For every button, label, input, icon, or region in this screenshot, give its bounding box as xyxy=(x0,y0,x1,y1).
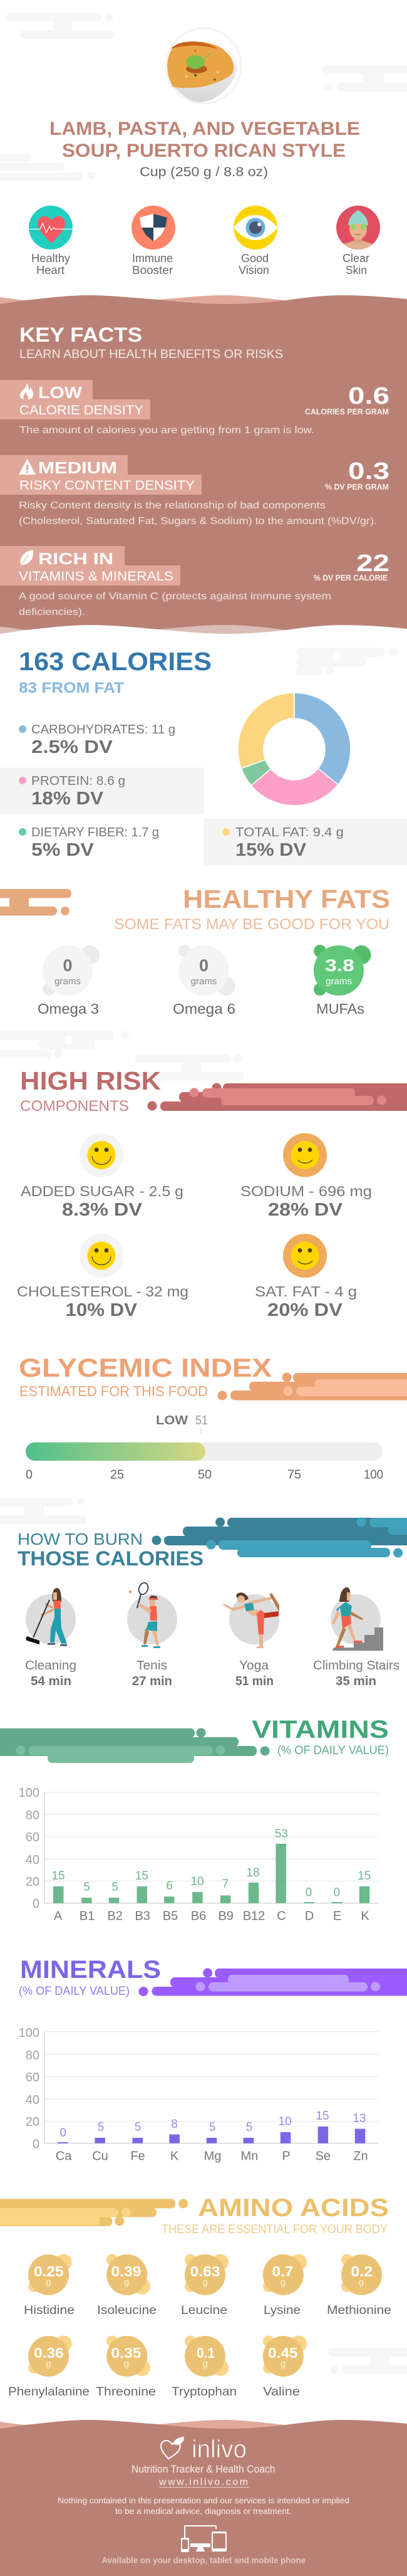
figure: person sweeping xyxy=(26,1588,67,1646)
chart: minerals bar chart: Ca xyxy=(56,2150,72,2163)
chart: vitamins bar chart: A xyxy=(54,1910,63,1923)
chart: vitamins bar chart: 15 xyxy=(358,1869,371,1883)
chart: minerals bar chart: Se xyxy=(316,2150,331,2163)
serving size: Cup (250 g / 8.8 oz) xyxy=(140,165,268,179)
disclaimer: to be a medical advice, diagnosis or treatment. xyxy=(115,2506,292,2516)
chart: glycemic index gauge: 25 xyxy=(110,1468,124,1482)
subheading: components: COMPONENTS xyxy=(20,1098,129,1115)
legend: dietary fiber: DIETARY FIBER: 1.7 g xyxy=(31,826,159,839)
banner: how to burn xyxy=(152,1517,407,1557)
icon: healthy heart xyxy=(29,206,73,250)
chart: vitamins bar chart: 53 xyxy=(275,1827,288,1841)
legend: carbohydrates: 2.5% DV xyxy=(31,737,113,757)
chart: vitamins bar chart: 18 xyxy=(246,1866,260,1879)
amino: tryptophan: Tryptophan xyxy=(172,2385,237,2399)
fact: vitamins and minerals: A good source of Vitamin C (protects against immune system xyxy=(19,591,331,602)
amino: threonine: 0.35 xyxy=(111,2345,142,2361)
amino: isoleucine xyxy=(97,2254,157,2317)
amino: valine: 0.45 xyxy=(268,2345,298,2361)
stat: omega 3: 0 xyxy=(63,956,73,975)
icon: devices xyxy=(181,2525,227,2552)
figure: stairs climber xyxy=(332,1587,383,1651)
legend: total fat xyxy=(204,819,407,865)
banner: high risk xyxy=(148,1083,407,1111)
amino: phenylalanine: g xyxy=(46,2358,51,2369)
heading: vitamins: VITAMINS xyxy=(252,1716,389,1743)
chart: minerals bar chart: 5 xyxy=(209,2121,215,2134)
icon: immune booster xyxy=(131,206,175,250)
amino: methionine: Methionine xyxy=(327,2304,391,2317)
label: good vision xyxy=(239,252,269,276)
amino: tryptophan: g xyxy=(202,2358,208,2369)
chart: vitamins bar chart: 100 xyxy=(19,1786,39,1800)
subheading: amino acids: THESE ARE ESSENTIAL FOR YOUR BODY xyxy=(162,2223,388,2236)
heading: amino acids: AMINO ACIDS xyxy=(198,2194,389,2222)
stat: omega 3 xyxy=(38,945,100,1017)
stat: omega 3: Omega 3 xyxy=(38,1001,99,1017)
chart: vitamins bar chart: 0 xyxy=(333,1886,340,1900)
chart: vitamins bar chart: 80 xyxy=(26,1809,39,1822)
legend: carbohydrates xyxy=(19,723,175,757)
amino: methionine: 0.2 xyxy=(351,2263,373,2279)
icon: smiley xyxy=(88,1141,115,1169)
panel: health benefits xyxy=(29,206,380,276)
chart: minerals bar chart: 5 xyxy=(98,2121,104,2134)
fact: risky content density xyxy=(0,455,389,527)
legend: protein xyxy=(0,767,204,814)
subheading: minerals: (% OF DAILY VALUE) xyxy=(19,1985,130,1998)
chart: minerals bar chart: 60 xyxy=(26,2071,39,2084)
fact: calorie density: LOW xyxy=(38,383,83,402)
fact: vitamins and minerals: 22 xyxy=(356,550,389,577)
disclaimer xyxy=(58,2496,349,2516)
risk: sodium: SODIUM - 696 mg xyxy=(240,1183,372,1199)
amino: valine: Valine xyxy=(263,2385,300,2399)
fact: calorie density: 0.6 xyxy=(348,383,389,409)
subheading: healthy fats: SOME FATS MAY BE GOOD FOR YOU xyxy=(114,916,389,933)
panel: key facts background xyxy=(0,295,407,634)
chart: minerals bar chart: 13 xyxy=(353,2112,366,2125)
legend: total fat: 15% DV xyxy=(235,840,307,860)
subheading: estimated: ESTIMATED FOR THIS FOOD xyxy=(19,1383,208,1399)
heading: healthy fats: HEALTHY FATS xyxy=(183,885,390,913)
chart: vitamins bar chart: E xyxy=(333,1910,341,1923)
amino: lysine xyxy=(263,2254,307,2317)
risk: added sugar: ADDED SUGAR - 2.5 g xyxy=(21,1183,183,1199)
chart: vitamins bar chart: 6 xyxy=(166,1879,173,1893)
icon: leaf xyxy=(20,550,33,565)
fact: vitamins and minerals: % DV PER CALORIE xyxy=(314,574,388,582)
activity: tennis xyxy=(127,1582,177,1688)
heading: glycemic index: GLYCEMIC INDEX xyxy=(19,1353,272,1382)
stat: omega 6: Omega 6 xyxy=(173,1001,235,1017)
chart: vitamins bar chart: K xyxy=(361,1910,369,1923)
chart: vitamins bar chart: 10 xyxy=(190,1875,204,1888)
amino: phenylalanine: Phenylalanine xyxy=(8,2385,90,2399)
icon: good vision xyxy=(234,206,277,250)
label: healthy heart xyxy=(31,252,70,276)
chart: vitamins bar chart: 0 xyxy=(33,1897,39,1911)
amino: isoleucine: g xyxy=(124,2277,129,2288)
title: SOUP, PUERTO RICAN STYLE xyxy=(62,140,346,161)
label: immune booster: Booster xyxy=(132,264,173,276)
title xyxy=(49,118,360,161)
chart: vitamins bar chart xyxy=(19,1786,379,1923)
legend: dietary fiber xyxy=(19,826,159,860)
fact: calorie density: CALORIE DENSITY xyxy=(19,403,143,418)
label: good vision: Good xyxy=(241,252,269,265)
activity: tennis: 27 min xyxy=(132,1674,172,1688)
chart: minerals bar chart: 20 xyxy=(26,2115,39,2129)
fact: risky content density: (Cholesterol, Saturated Fat, Sugars & Sodium) to the amount (%DV/gr). xyxy=(19,516,377,527)
heading: how to burn: THOSE CALORIES xyxy=(18,1547,204,1570)
amino: histidine: Histidine xyxy=(24,2304,75,2317)
chart: vitamins bar chart: 15 xyxy=(135,1869,148,1883)
label: good vision: Vision xyxy=(239,264,269,276)
banner: healthy fats xyxy=(0,889,71,915)
chart: minerals bar chart: 100 xyxy=(19,2026,39,2040)
amino: lysine: Lysine xyxy=(264,2304,301,2317)
amino: leucine xyxy=(181,2254,229,2317)
legend: protein: 18% DV xyxy=(31,789,104,809)
amino: isoleucine: 0.39 xyxy=(111,2263,142,2279)
subheading: key facts: LEARN ABOUT HEALTH BENEFITS OR RISKS xyxy=(19,348,283,361)
chart: vitamins bar chart: 5 xyxy=(83,1881,90,1894)
icon: warning triangle xyxy=(19,459,36,475)
title: LAMB, PASTA, AND VEGETABLE xyxy=(49,118,360,139)
legend: protein: PROTEIN: 8.6 g xyxy=(31,774,125,788)
chart: vitamins bar chart: D xyxy=(305,1910,314,1923)
fact: calorie density: The amount of calories you are getting from 1 gram is low. xyxy=(19,425,314,436)
risk: saturated fat xyxy=(255,1234,357,1320)
availability note: Available on your desktop, tablet and mobile phone xyxy=(101,2556,306,2565)
chart: vitamins bar chart: 7 xyxy=(222,1878,229,1891)
chart: glycemic index gauge: 100 xyxy=(364,1468,383,1482)
stat: mufas: MUFAs xyxy=(316,1001,364,1017)
amino: histidine: 0.25 xyxy=(34,2263,64,2279)
risk: cholesterol: CHOLESTEROL - 32 mg xyxy=(17,1283,188,1300)
logo: inlivo heart xyxy=(161,2437,183,2459)
chart: minerals bar chart xyxy=(19,2026,379,2163)
label: immune booster xyxy=(132,252,173,276)
website: www.inlivo.com xyxy=(158,2477,248,2488)
chart: calorie donut xyxy=(238,693,351,806)
amino: leucine: 0.63 xyxy=(190,2263,220,2279)
stat: omega 6 xyxy=(173,945,235,1017)
risk: saturated fat: 20% DV xyxy=(267,1300,343,1320)
amino: threonine xyxy=(96,2336,156,2399)
label: clear skin: Clear xyxy=(343,252,369,265)
fact: vitamins and minerals: RICH IN xyxy=(38,549,113,568)
stat: mufas xyxy=(314,945,371,1017)
activity: climbing stairs: Climbing Stairs xyxy=(313,1659,399,1673)
icon: smiley xyxy=(291,1141,319,1169)
banner: amino acids xyxy=(0,2199,188,2226)
panel: footer xyxy=(0,2420,407,2576)
amino: histidine: g xyxy=(46,2277,51,2288)
fact: calorie density: CALORIES PER GRAM xyxy=(305,407,389,416)
activity: tennis: Tenis xyxy=(137,1659,167,1673)
label: healthy heart: Healthy xyxy=(31,252,70,265)
chart: minerals bar chart: Cu xyxy=(92,2150,108,2163)
amino: threonine: g xyxy=(124,2358,129,2369)
icon: flame xyxy=(20,383,33,399)
activity: climbing stairs xyxy=(313,1587,399,1688)
risk: sodium: 28% DV xyxy=(268,1200,343,1220)
chart: minerals bar chart: 80 xyxy=(26,2049,39,2063)
fact: calorie density xyxy=(0,380,389,436)
heading: calories: 163 CALORIES xyxy=(19,647,212,676)
chart: minerals bar chart: 5 xyxy=(246,2121,252,2134)
chart: vitamins bar chart: B2 xyxy=(107,1910,123,1923)
chart: vitamins bar chart: B9 xyxy=(218,1910,234,1923)
chart: vitamins bar chart: 5 xyxy=(111,1881,118,1894)
amino: leucine: g xyxy=(202,2277,208,2288)
risk: cholesterol: 10% DV xyxy=(65,1300,138,1320)
banner: vitamins xyxy=(0,1728,269,1763)
amino: histidine xyxy=(24,2254,75,2317)
amino: leucine: Leucine xyxy=(181,2304,227,2317)
legend: total fat: TOTAL FAT: 9.4 g xyxy=(235,826,344,839)
fact: risky content density: RISKY CONTENT DENSITY xyxy=(19,478,195,493)
activity: cleaning: Cleaning xyxy=(25,1659,76,1673)
chart: minerals bar chart: 15 xyxy=(316,2110,329,2123)
risk: added sugar xyxy=(21,1133,183,1220)
risk: saturated fat: SAT. FAT - 4 g xyxy=(255,1283,357,1300)
icon: clear skin xyxy=(336,206,380,250)
subheading: calories from fat: 83 FROM FAT xyxy=(19,680,124,697)
amino: phenylalanine xyxy=(8,2336,90,2399)
amino: phenylalanine: 0.36 xyxy=(34,2345,64,2361)
heading: high risk: HIGH RISK xyxy=(20,1066,161,1095)
chart: vitamins bar chart: 15 xyxy=(51,1869,65,1883)
chart: minerals bar chart: 5 xyxy=(135,2121,141,2134)
chart: minerals bar chart: K xyxy=(170,2150,179,2163)
legend: dietary fiber: 5% DV xyxy=(31,840,95,860)
amino: methionine xyxy=(327,2254,391,2317)
label: healthy heart: Heart xyxy=(36,264,64,276)
fact: vitamins and minerals: VITAMINS & MINERALS xyxy=(19,569,173,584)
risk: added sugar: 8.3% DV xyxy=(62,1200,143,1220)
fact: vitamins and minerals: deficiencies). xyxy=(19,607,85,618)
heading: how to burn: HOW TO BURN xyxy=(18,1530,143,1548)
chart: glycemic index gauge: 0 xyxy=(26,1468,33,1482)
chart: minerals bar chart: 0 xyxy=(33,2138,39,2152)
banner: glycemic index xyxy=(218,1373,407,1401)
chart: minerals bar chart: Mg xyxy=(204,2150,221,2163)
chart: minerals bar chart: Zn xyxy=(353,2150,368,2163)
amino: methionine: g xyxy=(359,2277,364,2288)
subheading: vitamins: (% OF DAILY VALUE) xyxy=(277,1744,389,1757)
chart: vitamins bar chart: B1 xyxy=(80,1910,95,1923)
label: immune booster: Immune xyxy=(132,252,173,265)
stat: omega 6: grams xyxy=(191,976,217,987)
banner: minerals xyxy=(139,1969,407,1996)
risk: cholesterol xyxy=(17,1234,188,1320)
amino: valine: g xyxy=(281,2358,286,2369)
chart: vitamins bar chart: B12 xyxy=(243,1910,265,1923)
chart: vitamins bar chart: 40 xyxy=(26,1853,39,1867)
chart: minerals bar chart: Fe xyxy=(130,2150,145,2163)
amino: threonine: Threonine xyxy=(96,2385,156,2399)
chart: minerals bar chart: 10 xyxy=(278,2115,292,2128)
fact: risky content density: Risky Content density is the relationship of bad components xyxy=(19,500,326,511)
stat: mufas: grams xyxy=(326,976,352,987)
chart: vitamins bar chart: 60 xyxy=(26,1831,39,1844)
legend: carbohydrates: CARBOHYDRATES: 11 g xyxy=(31,723,175,737)
figure: yoga pose xyxy=(223,1592,279,1648)
chart: vitamins bar chart: 20 xyxy=(26,1875,39,1889)
activity: yoga: 51 min xyxy=(235,1674,274,1688)
chart: vitamins bar chart: B6 xyxy=(191,1910,206,1923)
chart: glycemic index gauge: 50 xyxy=(198,1468,212,1482)
stat: mufas: 3.8 xyxy=(325,956,354,975)
stat: omega 6: 0 xyxy=(199,956,209,975)
disclaimer: Nothing contained in this presentation and our services is intended or implied xyxy=(58,2496,349,2505)
chart: glycemic index gauge: 75 xyxy=(287,1468,301,1482)
chart: minerals bar chart: P xyxy=(282,2150,291,2163)
activity: climbing stairs: 35 min xyxy=(336,1674,376,1688)
risk: sodium xyxy=(240,1133,372,1220)
chart: minerals bar chart: 8 xyxy=(171,2118,178,2131)
stat: omega 3: grams xyxy=(54,976,81,987)
label: clear skin: Skin xyxy=(346,264,367,276)
chart: minerals bar chart: 0 xyxy=(59,2127,66,2140)
chart: glycemic index gauge: 51 xyxy=(195,1414,208,1427)
chart: glycemic index gauge xyxy=(26,1414,383,1482)
heading: minerals: MINERALS xyxy=(20,1956,161,1984)
logo: inlivo wordmark: inlivo xyxy=(192,2436,247,2463)
heading: key facts: KEY FACTS xyxy=(19,323,142,346)
chart: vitamins bar chart: B3 xyxy=(135,1910,150,1923)
chart: vitamins bar chart: B5 xyxy=(163,1910,178,1923)
fact: risky content density: % DV PER GRAM xyxy=(325,483,389,492)
chart: glycemic index gauge: LOW xyxy=(156,1414,188,1427)
amino: valine xyxy=(263,2336,307,2399)
icon: smiley xyxy=(291,1241,319,1270)
fact: risky content density: MEDIUM xyxy=(38,458,117,477)
tagline: Nutrition Tracker & Health Coach xyxy=(131,2464,276,2475)
activity: yoga: Yoga xyxy=(239,1659,269,1673)
amino: lysine: g xyxy=(281,2277,286,2288)
figure: tennis player xyxy=(129,1582,160,1648)
chart: minerals bar chart: Mn xyxy=(241,2150,258,2163)
activity: cleaning xyxy=(25,1588,76,1688)
chart: minerals bar chart: 40 xyxy=(26,2093,39,2107)
amino: isoleucine: Isoleucine xyxy=(97,2304,157,2317)
amino: lysine: 0.7 xyxy=(272,2263,293,2279)
fact: vitamins and minerals xyxy=(0,546,389,618)
heading: how to burn xyxy=(18,1530,204,1570)
amino: tryptophan: 0.1 xyxy=(197,2345,215,2361)
icon: soup bowl xyxy=(166,28,241,103)
fact: risky content density: 0.3 xyxy=(348,458,389,485)
activity: cleaning: 54 min xyxy=(31,1674,71,1688)
icon: smiley xyxy=(88,1241,115,1270)
label: clear skin xyxy=(343,252,369,276)
amino: tryptophan xyxy=(172,2336,237,2399)
activity: yoga xyxy=(223,1592,279,1688)
chart: vitamins bar chart: C xyxy=(277,1910,286,1923)
chart: vitamins bar chart: 0 xyxy=(306,1886,312,1900)
